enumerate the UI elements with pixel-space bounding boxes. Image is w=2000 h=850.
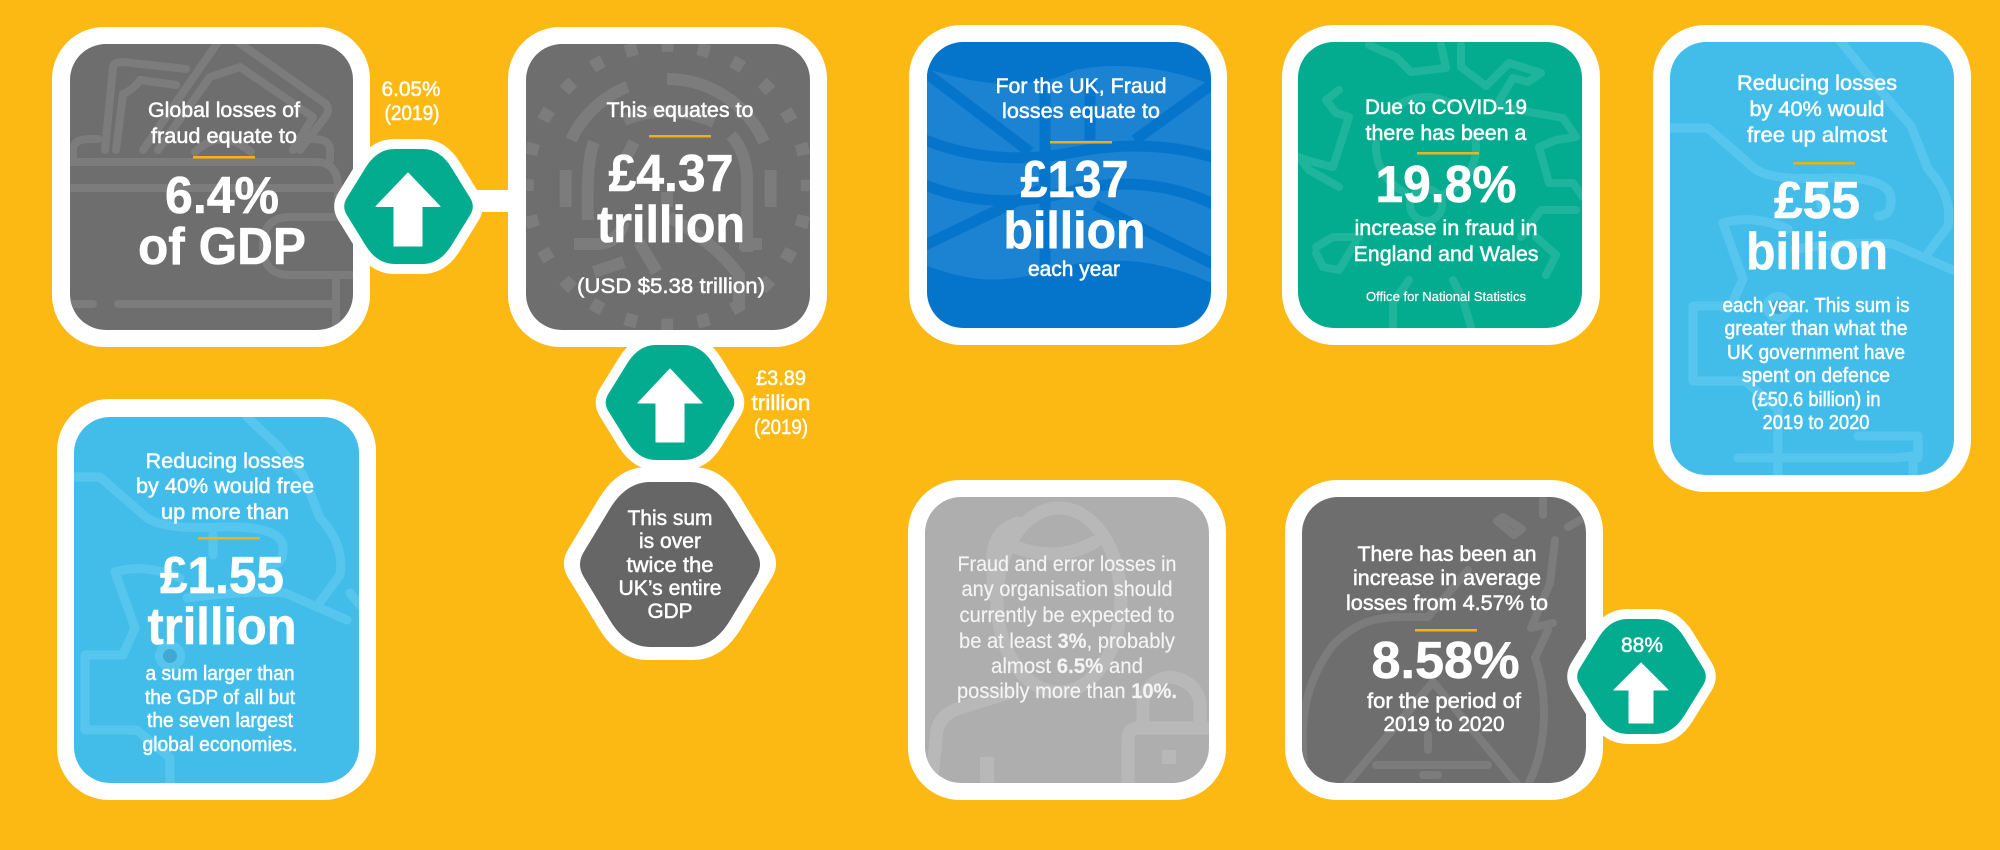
panel: UK fraud losses (909, 25, 1227, 345)
panel: average losses increase (1285, 480, 1603, 800)
card frame (1282, 25, 1600, 345)
panel: reducing global losses (57, 399, 376, 800)
card fill (70, 44, 353, 330)
body text: be at least 3%, probably (959, 629, 1175, 653)
big stat (1746, 172, 1888, 281)
body text: England and Wales (1354, 242, 1538, 266)
big stat: trillion (148, 598, 296, 656)
body text: spent on defence (1742, 365, 1890, 387)
watermark: union flag (925, 66, 1215, 285)
body text (142, 663, 298, 756)
watermark: virus (1299, 45, 1583, 327)
heading (996, 74, 1166, 123)
card fill (927, 42, 1211, 328)
body text (1354, 216, 1538, 266)
watermark: money bag (1303, 500, 1580, 785)
panel: reducing UK losses (1653, 25, 1971, 492)
body text: UK government have (1727, 342, 1905, 364)
divider (1417, 152, 1479, 154)
divider (193, 156, 255, 158)
watermark: map with pin (1658, 26, 1955, 486)
card frame (1653, 25, 1971, 492)
body text: the GDP of all but (145, 687, 295, 709)
divider (649, 135, 711, 138)
heading: there has been a (1366, 121, 1527, 145)
big stat (138, 167, 306, 276)
source: Office for National Statistics (1366, 289, 1526, 304)
watermark: wallet (68, 42, 358, 337)
heading: free up almost (1747, 123, 1887, 147)
subtext: 2019 to 2020 (1384, 712, 1505, 736)
body text: almost 6.5% and (991, 654, 1143, 678)
divider (1793, 162, 1855, 164)
body text: greater than what the (1724, 318, 1908, 340)
big stat: 8.58% (1372, 632, 1520, 690)
icon: up arrow hexagon 1 (344, 149, 473, 264)
subtext (1367, 689, 1521, 736)
body text: global economies. (142, 734, 298, 756)
USD equivalent: (USD $5.38 trillion) (577, 274, 765, 298)
card fill (1302, 497, 1586, 783)
body text: increase in fraud in (1354, 216, 1538, 240)
card fill (74, 417, 359, 783)
subtext: for the period of (1367, 689, 1521, 713)
big stat: billion (1004, 202, 1146, 260)
body text: the seven largest (147, 710, 293, 732)
heading: Global losses of (148, 98, 300, 122)
heading: increase in average (1353, 566, 1541, 590)
heading: losses equate to (1002, 99, 1160, 123)
card fill (1670, 42, 1954, 475)
heading (136, 449, 314, 524)
body text: possibly more than 10%. (957, 679, 1177, 703)
heading (1346, 542, 1548, 615)
hexagon text: twice the (626, 553, 714, 577)
body text: 2019 to 2020 (1762, 412, 1870, 434)
heading: Due to COVID-19 (1365, 95, 1527, 119)
body text: (£50.6 billion) in (1752, 389, 1880, 411)
watermark: person and padlock (931, 508, 1218, 787)
divider (1050, 141, 1112, 144)
panel: global losses of fraud (52, 27, 370, 347)
panel: twice the UK GDP hexagon (564, 467, 776, 660)
hexagon text: GDP (648, 599, 692, 623)
card fill (526, 44, 810, 330)
heading: up more than (161, 500, 289, 524)
card fill (925, 497, 1209, 783)
heading: by 40% would (1750, 97, 1884, 121)
body text (957, 552, 1177, 703)
body text: each year. This sum is (1722, 295, 1910, 317)
divider (1415, 629, 1477, 632)
hexagon text: is over (639, 529, 701, 553)
label: 3.89 trillion 2019: £3.89 (756, 366, 806, 390)
heading: losses from 4.57% to (1346, 591, 1548, 615)
heading (1365, 95, 1527, 145)
heading: There has been an (1358, 542, 1536, 566)
connector between global loss cards (470, 190, 530, 212)
big stat: £1.55 (160, 547, 284, 605)
big stat: trillion (597, 196, 745, 254)
label: 6.05% 2019 (382, 77, 440, 125)
panel: COVID-19 fraud increase (1282, 25, 1600, 345)
icon: 88% up arrow hexagon: 88% (1621, 633, 1663, 657)
heading: This equates to (606, 98, 754, 122)
big stat: £55 (1774, 172, 1860, 230)
icon: up arrow hexagon 2 (606, 345, 734, 460)
label: 3.89 trillion 2019: (2019) (754, 415, 808, 439)
panel: equates to 4.37 trillion (508, 27, 827, 347)
hexagon frame (564, 467, 776, 660)
label: 6.05% 2019: (2019) (384, 101, 440, 125)
panel: fraud and error losses (908, 480, 1226, 800)
card frame (52, 27, 370, 347)
label: 3.89 trillion 2019 (752, 366, 810, 439)
big stat: 19.8% (1376, 156, 1516, 214)
heading: Reducing losses (1737, 71, 1897, 95)
card fill (1298, 42, 1582, 328)
card frame (909, 25, 1227, 345)
hexagon text: UK’s entire (618, 576, 722, 600)
big stat (597, 145, 745, 254)
hexagon fill (580, 482, 760, 647)
card frame (508, 27, 827, 347)
heading (1737, 71, 1897, 147)
label: 3.89 trillion 2019: trillion (752, 391, 810, 415)
watermark: map with pin (70, 417, 360, 790)
watermark: fingerprint (527, 45, 807, 325)
subtext: each year (1028, 257, 1120, 281)
body text: Fraud and error losses in (958, 552, 1176, 576)
hexagon text (618, 506, 722, 623)
label: 6.05% 2019: 6.05% (382, 77, 440, 101)
big stat: 6.4% (165, 167, 279, 225)
big stat (148, 547, 296, 656)
body text: a sum larger than (146, 663, 294, 685)
card frame (1285, 480, 1603, 800)
body text (1722, 295, 1910, 434)
hexagon text: This sum (628, 506, 712, 530)
big stat: of GDP (138, 218, 306, 276)
heading: fraud equate to (151, 124, 297, 148)
big stat (1004, 151, 1146, 260)
icon: 88% up arrow hexagon (1577, 619, 1706, 734)
big stat: £137 (1020, 151, 1128, 209)
body text: any organisation should (962, 577, 1172, 601)
body text: currently be expected to (960, 603, 1175, 627)
card frame (57, 399, 376, 800)
card frame (908, 480, 1226, 800)
big stat: £4.37 (608, 145, 734, 203)
heading: For the UK, Fraud (996, 74, 1166, 98)
heading: Reducing losses (146, 449, 304, 473)
heading: by 40% would free (136, 474, 314, 498)
big stat: billion (1746, 223, 1888, 281)
divider (198, 537, 260, 540)
heading (148, 98, 300, 148)
